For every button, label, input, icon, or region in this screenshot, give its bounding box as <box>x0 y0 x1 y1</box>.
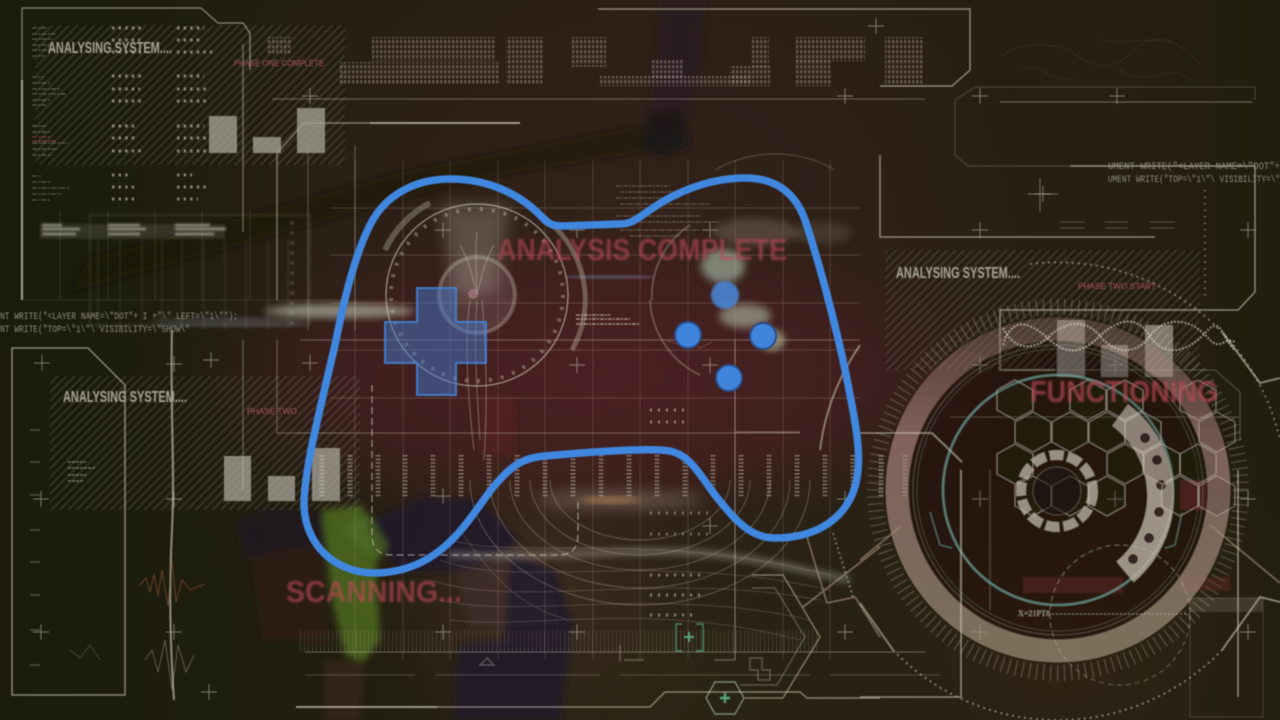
small label: phase one complete: PHASE ONE COMPLETE <box>234 59 324 68</box>
panel label: analysing system, lower left: ANALYSING SYSTEM.... <box>63 389 187 406</box>
gauge: large dotted ring <box>803 262 1280 720</box>
panel label: analysing system, top left: ANALYSING SYSTEM.... <box>48 40 172 57</box>
dashed frame and concentric arcs <box>372 340 830 660</box>
pixel block chart: top <box>268 37 923 86</box>
panel frame: top centre <box>598 9 970 86</box>
small label: coordinates: X=21PT8 <box>1018 608 1050 618</box>
lens flares <box>150 275 850 580</box>
DNA helix <box>1003 322 1235 350</box>
hatched panels <box>35 25 1200 510</box>
athlete silhouette: upper runner and shadow <box>70 0 704 292</box>
small label: phase two: PHASE TWO <box>247 407 297 416</box>
bottom frame with hex badge <box>296 575 880 714</box>
heading: analysis complete: ANALYSIS COMPLETE <box>497 232 787 267</box>
gauge: hexagon cluster <box>997 380 1235 516</box>
heading: scanning: SCANNING... <box>286 574 462 609</box>
world globe hologram <box>576 154 852 422</box>
panel frame: right <box>880 155 1255 440</box>
dot matrix: top left <box>112 28 212 199</box>
panel frame: top right with world map <box>955 39 1255 166</box>
gauge: main rings <box>860 329 1263 717</box>
bright streak bars: left <box>40 215 310 330</box>
vertical label strip <box>322 455 905 497</box>
radar circle with fountain <box>385 203 585 460</box>
bar chart: right <box>1057 320 1173 377</box>
panel frame: top left <box>22 8 925 330</box>
code text: left, line 1: NT WRITE("<LAYER NAME=\"DOT"+ I +"\" LEFT=\"1\""); <box>0 311 238 323</box>
controller buttons <box>675 322 776 391</box>
small label: phase two start: PHASE TWO START <box>1078 282 1156 291</box>
bar chart: top left <box>209 108 325 153</box>
controller d-pad <box>385 288 486 395</box>
controller outline <box>304 178 859 573</box>
icon: game controller <box>304 178 859 573</box>
athlete silhouette: crouching player <box>234 395 572 720</box>
panel frame: lower left <box>12 330 860 700</box>
code lines: top left <box>32 28 70 200</box>
gauge: centre gear <box>1021 455 1093 527</box>
code text: left, line 2: NT WRITE("TOP=\"1\"\ VISIBILITY=\"SHOW\" <box>0 324 190 336</box>
heading: functioning: FUNCTIONING <box>1030 374 1218 409</box>
bar chart: lower left <box>224 448 340 501</box>
panel label: analysing system, right: ANALYSING SYSTEM.... <box>896 265 1020 282</box>
